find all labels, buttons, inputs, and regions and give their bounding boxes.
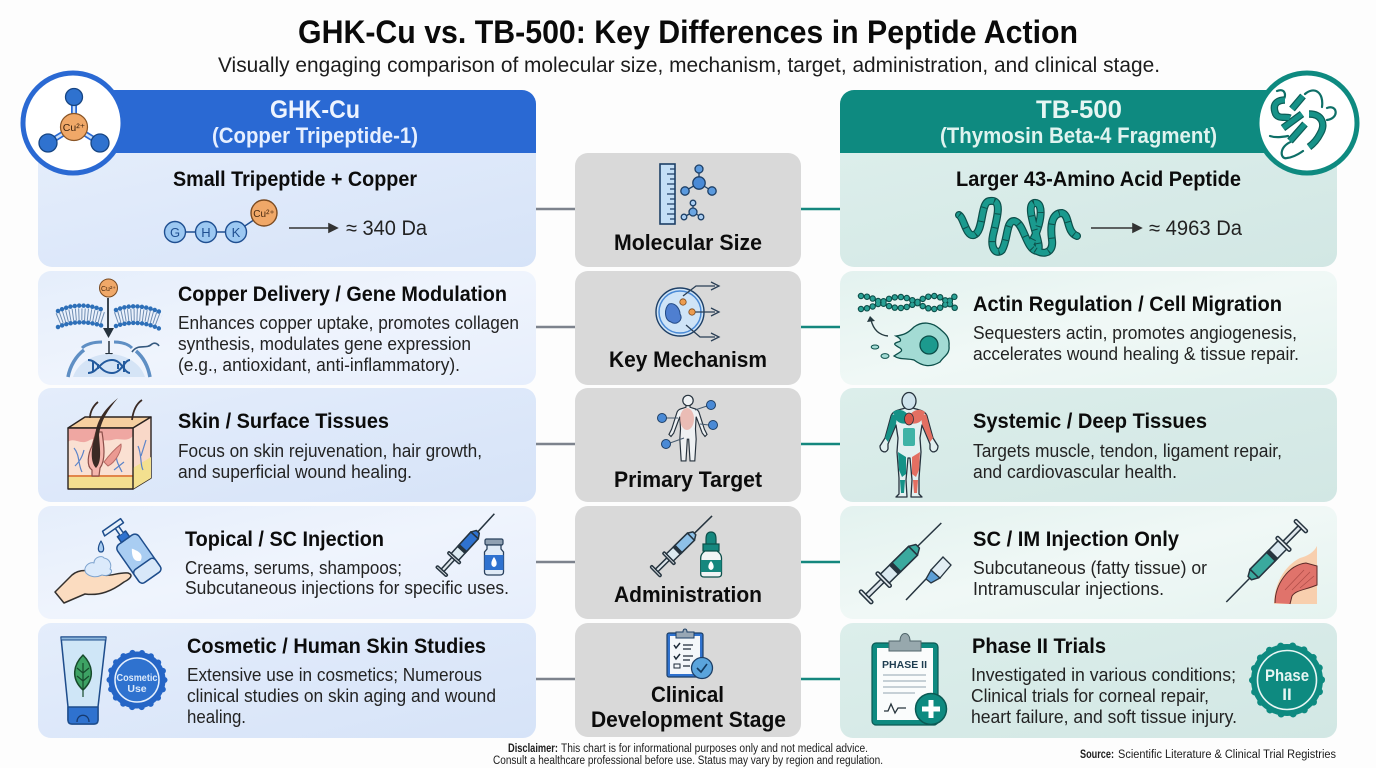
value: 340 Da: ≈ 340 Da bbox=[346, 217, 427, 240]
subtitle: Visually engaging comparison of molecular size, mechanism, target, administration, and clinical stage. bbox=[218, 54, 1160, 77]
body text bbox=[973, 558, 1207, 599]
icon: skin cross-section bbox=[68, 398, 151, 489]
category: clinical development stage bbox=[575, 623, 801, 737]
icon: G-H-K copper chain bbox=[164, 200, 277, 242]
panel: administration TB-500 bbox=[840, 506, 1337, 619]
icon: syringe and dropper bottle bbox=[649, 510, 722, 578]
heading: Larger 43-Amino Acid Peptide bbox=[956, 168, 1241, 191]
arrow bbox=[1091, 224, 1141, 232]
body text bbox=[973, 323, 1299, 364]
icon: cosmetic use badge: Cosmetic bbox=[116, 672, 158, 684]
label: Primary Target bbox=[614, 467, 763, 492]
heading: Small Tripeptide + Copper bbox=[173, 168, 417, 191]
panel: mechanism GHK-Cu bbox=[38, 271, 536, 385]
body text: Targets muscle, tendon, ligament repair, bbox=[973, 441, 1282, 461]
icon: cosmetic use badge bbox=[108, 652, 166, 708]
icon: G-H-K copper chain: Cu²⁺ bbox=[253, 209, 275, 220]
body text: healing. bbox=[187, 707, 246, 727]
icon: GHK-Cu atom badge: Cu²⁺ bbox=[63, 122, 86, 134]
body text: Focus on skin rejuvenation, hair growth, bbox=[178, 441, 482, 461]
panel: target GHK-Cu bbox=[38, 388, 536, 502]
heading: Systemic / Deep Tissues bbox=[973, 410, 1207, 433]
icon: actin filament and migrating cell bbox=[861, 295, 957, 366]
disclaimer: This chart is for informational purposes only and not medical advice. bbox=[561, 743, 868, 755]
body text: and cardiovascular health. bbox=[973, 462, 1177, 482]
label bbox=[591, 682, 786, 732]
body text: clinical studies on skin aging and wound bbox=[187, 686, 496, 706]
icon: G-H-K copper chain: G bbox=[170, 225, 180, 240]
icon: cream tube bbox=[61, 637, 106, 724]
body text bbox=[971, 665, 1237, 727]
body text: Extensive use in cosmetics; Numerous bbox=[187, 665, 482, 685]
heading: Thymosin Beta-4 Fragment: (Thymosin Beta-4 Fragment) bbox=[940, 123, 1217, 148]
body text bbox=[973, 441, 1282, 482]
heading: Topical / SC Injection bbox=[185, 528, 384, 551]
icon: GHK-Cu atom badge bbox=[23, 73, 123, 173]
heading: TB-500: TB-500 bbox=[1036, 96, 1122, 124]
category: administration bbox=[575, 506, 801, 619]
icon: body with target nodes bbox=[658, 395, 718, 461]
body text bbox=[178, 313, 519, 375]
icon: G-H-K copper chain: K bbox=[232, 225, 241, 240]
icon: syringe and vial bbox=[435, 508, 504, 577]
label: Administration bbox=[614, 582, 762, 607]
icon: G-H-K copper chain: H bbox=[201, 225, 211, 240]
icon: cosmetic use badge: Use bbox=[127, 683, 147, 695]
icon: copper crossing membrane to DNA bbox=[58, 279, 160, 377]
value: 4963 Da: ≈ 4963 Da bbox=[1149, 217, 1242, 240]
label: Development Stage bbox=[591, 707, 786, 732]
label: Molecular Size bbox=[614, 230, 762, 255]
heading: Copper Tripeptide-1: (Copper Tripeptide-1) bbox=[212, 123, 418, 148]
icon: muscular body bbox=[880, 392, 938, 497]
connector lines bbox=[536, 209, 840, 679]
body text: and superficial wound healing. bbox=[178, 462, 412, 482]
source: Scientific Literature & Clinical Trial Registries bbox=[1118, 749, 1336, 761]
title: GHK-Cu vs. TB-500: Key Differences in Peptide Action bbox=[298, 14, 1078, 50]
arrow bbox=[289, 224, 337, 232]
body text: Subcutaneous (fatty tissue) or bbox=[973, 558, 1207, 578]
disclaimer: Disclaimer: bbox=[508, 743, 558, 755]
panel: molecular size GHK-Cu bbox=[38, 153, 536, 267]
label: Key Mechanism bbox=[609, 347, 767, 372]
icon: copper crossing membrane to DNA: Cu²⁺ bbox=[101, 286, 116, 293]
category: molecular size bbox=[575, 153, 801, 267]
heading: Skin / Surface Tissues bbox=[178, 410, 389, 433]
heading: GHK-Cu: GHK-Cu bbox=[270, 96, 360, 124]
body text: Subcutaneous injections for specific uses. bbox=[185, 578, 509, 598]
panel: clinical stage TB-500 bbox=[840, 623, 1337, 738]
body text: Enhances copper uptake, promotes collagen bbox=[178, 313, 519, 333]
body text: accelerates wound healing & tissue repair. bbox=[973, 344, 1299, 364]
icon: hand with pump bottle bbox=[55, 516, 163, 603]
icon: two syringes bbox=[858, 516, 951, 605]
heading: Phase II Trials bbox=[972, 635, 1106, 658]
icon: Phase II badge bbox=[1251, 644, 1323, 716]
icon: Phase II badge: II bbox=[1282, 685, 1292, 704]
body text: Creams, serums, shampoos; bbox=[185, 558, 402, 578]
panel: administration GHK-Cu bbox=[38, 506, 536, 619]
body text: (e.g., antioxidant, anti-inflammatory). bbox=[178, 355, 460, 375]
body text: heart failure, and soft tissue injury. bbox=[971, 707, 1237, 727]
body text: Sequesters actin, promotes angiogenesis, bbox=[973, 323, 1297, 343]
icon: Phase II badge: Phase bbox=[1265, 666, 1309, 685]
icon: Phase II clipboard bbox=[872, 634, 946, 725]
heading: SC / IM Injection Only bbox=[973, 528, 1179, 551]
panel: molecular size TB-500 bbox=[840, 153, 1337, 267]
icon: ruler and molecules bbox=[660, 164, 716, 224]
body text: Intramuscular injections. bbox=[973, 579, 1164, 599]
body text: Clinical trials for corneal repair, bbox=[971, 686, 1209, 706]
category: key mechanism bbox=[575, 271, 801, 385]
disclaimer: Consult a healthcare professional before use. Status may vary by region and regulation. bbox=[493, 755, 883, 767]
icon: checklist clipboard bbox=[667, 629, 712, 678]
source: Source: bbox=[1080, 749, 1114, 761]
panel: mechanism TB-500 bbox=[840, 271, 1337, 385]
panel: target TB-500 bbox=[840, 388, 1337, 502]
icon: Phase II clipboard: PHASE II bbox=[882, 659, 927, 671]
category: primary target bbox=[575, 388, 801, 502]
panel: clinical stage GHK-Cu bbox=[38, 623, 536, 738]
body text bbox=[187, 665, 496, 727]
body text bbox=[185, 558, 509, 598]
panel: TB-500 header bbox=[840, 90, 1337, 153]
body text bbox=[178, 441, 482, 482]
label: Clinical bbox=[651, 682, 724, 707]
icon: TB-500 protein badge bbox=[1257, 73, 1357, 173]
icon: folded peptide chain bbox=[959, 201, 1077, 253]
heading: Cosmetic / Human Skin Studies bbox=[187, 635, 486, 658]
heading: Copper Delivery / Gene Modulation bbox=[178, 283, 507, 306]
icon: cell with arrows bbox=[656, 282, 719, 341]
disclaimer bbox=[493, 743, 883, 767]
icon: syringe into shoulder bbox=[1219, 518, 1317, 609]
body text: synthesis, modulates gene expression bbox=[178, 334, 471, 354]
panel: GHK-Cu header bbox=[38, 90, 536, 153]
body text: Investigated in various conditions; bbox=[971, 665, 1236, 685]
heading: Actin Regulation / Cell Migration bbox=[973, 293, 1282, 316]
